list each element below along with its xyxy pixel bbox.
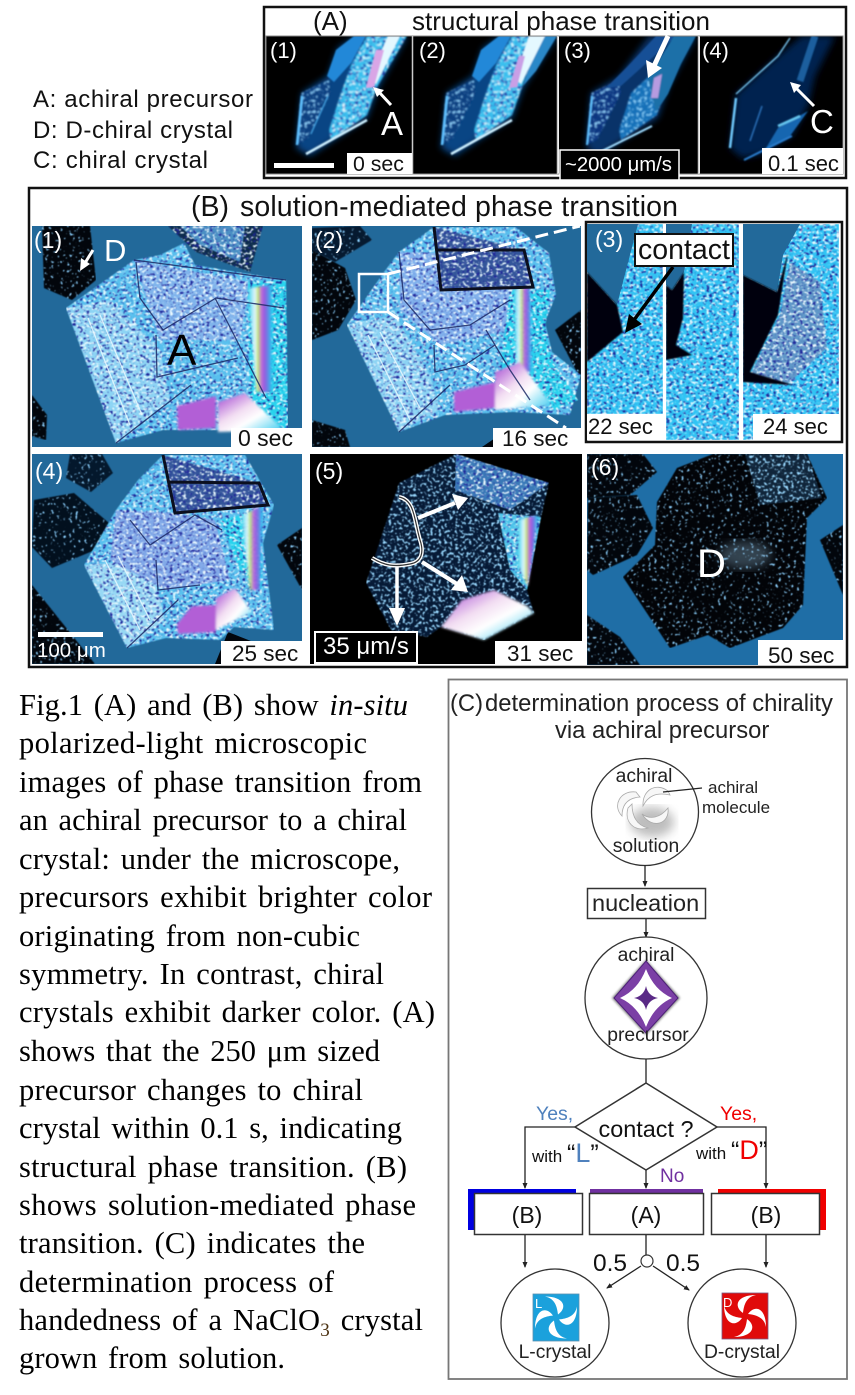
letter A: A: [381, 105, 403, 142]
node: D-crystal: [688, 1269, 796, 1377]
connector to decision: [645, 1059, 647, 1083]
legend: crystal abbreviations: A: achiral precursor: [33, 86, 253, 113]
panel C heading: (C): [450, 690, 483, 717]
micrograph B1: 0 sec: [32, 226, 302, 447]
micrograph B3: contact close-ups: [586, 222, 842, 442]
speed label: ~2000 μm/s: [565, 154, 672, 176]
time labels for B: [221, 425, 843, 668]
caption text: precursor changes to chiral: [19, 1073, 363, 1107]
zoom square and dashed guides in B2: [359, 226, 580, 428]
micrograph B2: 16 sec: [312, 226, 581, 447]
strip middle: [666, 224, 739, 440]
box A with purple bar: (A): [631, 1202, 661, 1228]
callout: achiral molecule: achiral: [708, 778, 758, 797]
micrograph A3: [559, 36, 698, 174]
branch: Yes with L: [525, 1103, 599, 1188]
panel B: solution-mediated phase transition: [29, 188, 847, 668]
time labels for B: 0 sec: [238, 425, 293, 451]
nucleation box: nucleation: [592, 890, 699, 916]
panel A frame labels and annotations: (1): [270, 38, 297, 63]
panel B number labels: (1): [34, 227, 62, 253]
arrow to D crystal: [765, 1235, 767, 1267]
panel B heading: (B): [191, 191, 229, 223]
panel C heading: via achiral precursor: [555, 717, 769, 744]
strip 22 sec: [587, 224, 663, 414]
branch: Yes with L: with: [531, 1147, 562, 1166]
icon: purple diamond with star: [614, 961, 678, 1033]
branch: No: [646, 1166, 684, 1188]
legend: crystal abbreviations: C: chiral crystal: [33, 147, 208, 174]
caption text: transition. (C) indicates the: [19, 1226, 365, 1260]
panel C heading: determination process of chirality: [485, 690, 833, 717]
random split with probabilities: [593, 1235, 700, 1290]
letter C: C: [810, 103, 834, 140]
panel B number labels: (5): [315, 458, 343, 484]
panel B number labels: [34, 226, 623, 484]
box A with purple bar: [590, 1189, 704, 1234]
time labels for B: 25 sec: [232, 641, 298, 666]
letter D and arrow in B1: [80, 233, 126, 271]
node: L-crystal: L-crystal: [519, 1342, 591, 1363]
caption text: images of phase transition from: [19, 765, 422, 799]
caption text: an achiral precursor to a chiral: [19, 803, 407, 837]
branch: Yes with D: Yes,: [720, 1103, 757, 1125]
random split with probabilities: 0.5: [666, 1250, 700, 1277]
branch: No: No: [660, 1166, 684, 1187]
icon: achiral molecule crescents: [618, 787, 670, 829]
decision diamond: contact?: [575, 1083, 717, 1170]
caption text: symmetry. In contrast, chiral: [19, 957, 384, 991]
branch: Yes with D: “D”: [731, 1135, 767, 1165]
caption text: crystal: under the microscope,: [19, 842, 400, 876]
caption text: shows that the 250 μm sized: [19, 1034, 380, 1068]
letter D in B6: D: [697, 542, 726, 586]
panel B number labels: (4): [35, 458, 63, 484]
legend: crystal abbreviations: D: D-chiral crystal: [33, 117, 233, 144]
branch: Yes with D: [695, 1103, 767, 1188]
scale bar 100 um: 100 μm: [37, 639, 106, 662]
legend: crystal abbreviations: [33, 86, 253, 174]
node: achiral precursor: [585, 937, 707, 1059]
node: achiral precursor: precursor: [607, 1025, 689, 1046]
arrow in frame 3: [646, 36, 668, 78]
micrograph B5: 31 sec: [310, 454, 582, 664]
caption text: polarized-light microscopic: [19, 726, 367, 760]
micrograph A2: [413, 36, 557, 174]
arrow to precursor: [645, 919, 647, 937]
box B with red bar: [712, 1189, 826, 1234]
caption text: 3: [320, 1320, 330, 1341]
time labels for B: 31 sec: [507, 641, 573, 666]
strip 24 sec: [743, 224, 839, 440]
panel C: determination process of chirality: [448, 680, 847, 1379]
panel A frame labels and annotations: [266, 36, 843, 180]
node: D-crystal: D-crystal: [704, 1342, 780, 1363]
arrow to nucleation: [644, 865, 646, 886]
box B with blue bar: [468, 1189, 582, 1234]
time label 0 sec: 0 sec: [353, 152, 404, 176]
arrow from contact label: [625, 267, 673, 333]
branch: Yes with L: “L”: [567, 1138, 599, 1168]
branch: Yes with D: with: [695, 1144, 726, 1163]
arrow to L crystal: [524, 1235, 526, 1267]
crystal veins B1: [88, 260, 286, 443]
speed label: [560, 150, 679, 180]
speed label 35 um/s: 35 μm/s: [323, 633, 409, 660]
caption text: crystals exhibit darker color. (A): [19, 995, 435, 1029]
node: achiral solution: [592, 758, 698, 866]
panel B number labels: (2): [315, 227, 343, 253]
time labels for B: 16 sec: [502, 426, 568, 451]
label 24 sec: 24 sec: [763, 414, 828, 439]
caption text: grown from solution.: [19, 1341, 285, 1375]
caption text: crystal: [330, 1303, 423, 1337]
caption text: [19, 688, 435, 1375]
node: achiral solution: solution: [613, 836, 679, 857]
icon: L pinwheel: L: [535, 1296, 542, 1311]
time labels for B: 50 sec: [768, 643, 834, 668]
caption text: precursors exhibit brighter color: [19, 880, 432, 914]
callout: achiral molecule: [663, 778, 770, 817]
node: L-crystal: [501, 1269, 609, 1377]
icon: D pinwheel: D: [723, 1295, 732, 1310]
crystal veins B2: [368, 252, 530, 432]
node: achiral solution: achiral: [616, 766, 672, 787]
time label 0.1 sec: 0.1 sec: [768, 151, 839, 176]
letter A in B1: A: [167, 326, 197, 375]
panel A frame labels and annotations: (4): [702, 38, 729, 63]
arrow pointing to C: [790, 82, 814, 106]
letter D and arrow in B1: D: [104, 233, 126, 268]
caption text: handedness of a NaClO: [19, 1303, 320, 1337]
caption text: Fig.1 (A) and (B) show in-situ: [19, 688, 408, 722]
panel C heading: [450, 690, 833, 744]
panel B number labels: (3): [595, 226, 623, 252]
micrograph B6: 50 sec: [587, 454, 843, 665]
panel A heading title: structural phase transition: [412, 6, 710, 36]
micrograph A4: 0.1 sec: [700, 36, 842, 174]
decision diamond: contact?: contact ?: [599, 1116, 693, 1142]
micrograph B4: 25 sec: [32, 454, 302, 664]
caption text: crystal within 0.1 s, indicating: [19, 1111, 402, 1145]
random split with probabilities: 0.5: [593, 1250, 627, 1277]
branch: Yes with L: Yes,: [536, 1103, 573, 1125]
panel A frame labels and annotations: (2): [419, 38, 446, 63]
scale bar: [274, 163, 334, 168]
caption text: shows solution-mediated phase: [19, 1188, 416, 1222]
panel B heading: solution-mediated phase transition: [240, 191, 678, 223]
crystal veins B4: [105, 515, 222, 648]
contact label: contact: [638, 234, 730, 266]
micrograph A1: 0 sec: [266, 36, 412, 174]
label 22 sec: 22 sec: [588, 414, 653, 439]
panel A: structural phase transition: [264, 6, 846, 180]
panel A frame labels and annotations: (3): [564, 38, 591, 63]
callout: achiral molecule: molecule: [702, 798, 770, 817]
box B with blue bar: (B): [512, 1202, 542, 1228]
node: achiral precursor: achiral: [618, 945, 674, 966]
growth front outline and arrows in B5: [372, 494, 468, 626]
arrow pointing to A: [373, 87, 391, 105]
caption text: originating from non-cubic: [19, 919, 360, 953]
caption text: determination process of: [19, 1265, 335, 1299]
panel B number labels: (6): [591, 454, 619, 480]
box B with red bar: (B): [751, 1202, 781, 1228]
caption text: structural phase transition. (B): [19, 1150, 407, 1184]
panel A heading label: (A): [313, 6, 348, 36]
